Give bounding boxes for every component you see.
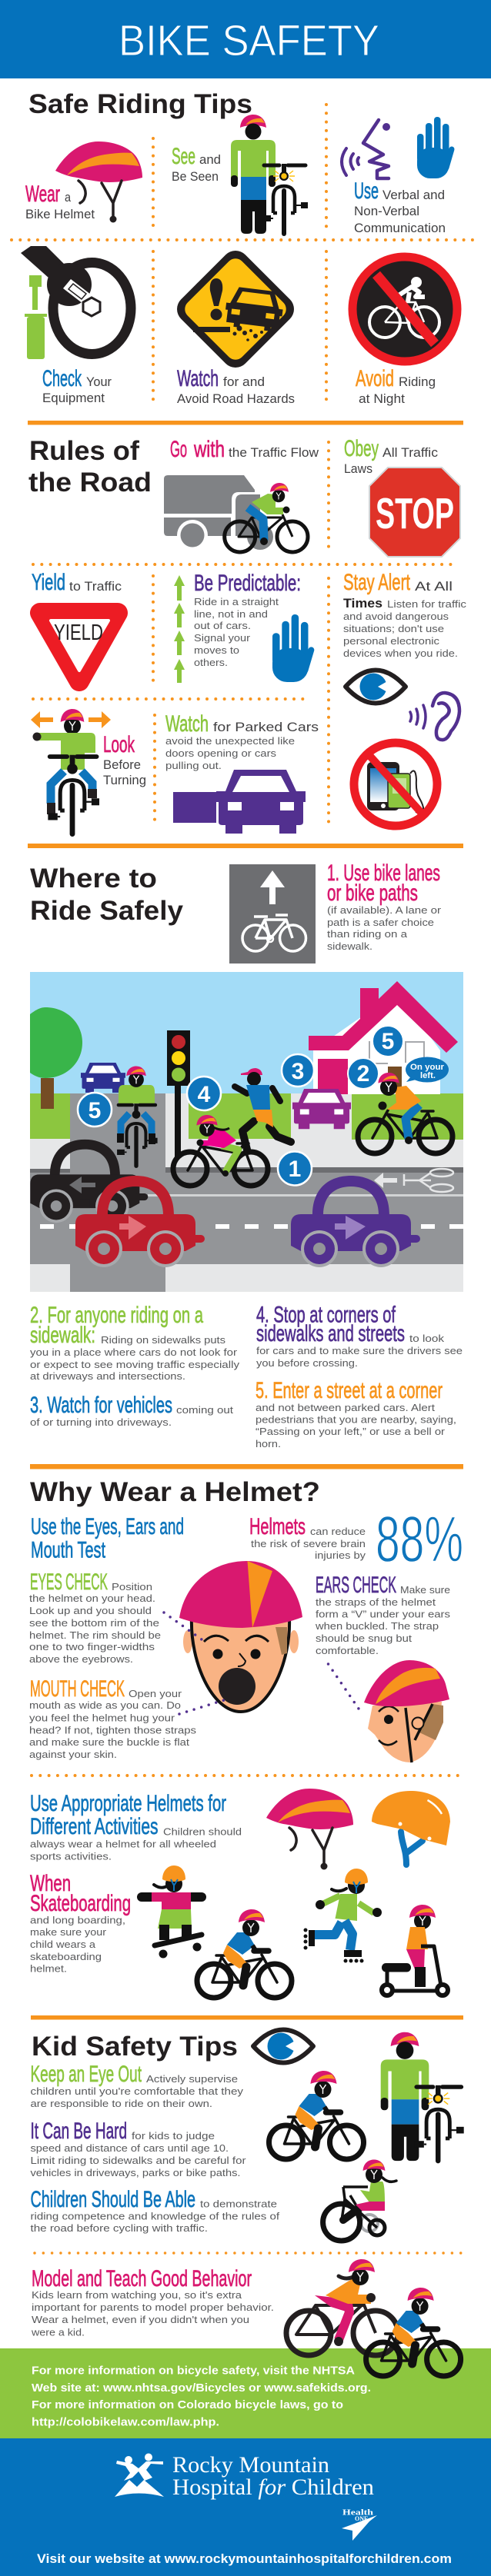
stat: helmets reduce injuries 88%: injuries by xyxy=(315,1549,366,1561)
figure: skateboarder xyxy=(137,1865,206,1958)
rule: be predictable: moves to xyxy=(194,644,239,656)
child on bike xyxy=(173,1115,268,1186)
text: stop at corners: you before crossing. xyxy=(256,1357,358,1369)
rule: go with the traffic flow: Go xyxy=(170,437,187,462)
text: eyes check: the helmet on your head. xyxy=(29,1593,155,1604)
heading: rules of the road: the Road xyxy=(28,468,152,498)
panel: where to ride safely xyxy=(30,860,463,1449)
icon: skateboard helmet xyxy=(372,1791,450,1865)
car: distant blue xyxy=(81,1063,125,1093)
text: ears check: the straps of the helmet xyxy=(316,1596,436,1608)
text: eyes check: Position xyxy=(112,1581,152,1593)
rule: be predictable: Ride in a straight xyxy=(194,596,279,607)
heading: where to ride safely: Ride Safely xyxy=(30,896,184,926)
marker 4 xyxy=(187,1077,221,1110)
text: ears check: form a “V” under your ears xyxy=(316,1609,451,1619)
tip: avoid riding at night: at Night xyxy=(359,392,405,406)
subheading: eyes ears mouth test xyxy=(31,1514,184,1563)
rule: be predictable: others. xyxy=(194,657,228,668)
rule: be predictable: out of cars. xyxy=(194,620,251,631)
text: keep an eye out: Actively supervise xyxy=(146,2074,238,2085)
tip: use verbal and non-verbal communication xyxy=(342,117,452,235)
panel: safe riding tips xyxy=(12,89,481,406)
text: keep an eye out: are responsible to ride on their own. xyxy=(31,2098,212,2109)
rule: obey all traffic laws: STOP xyxy=(376,489,454,538)
text: appropriate helmets: always wear a helmet for all wheeled xyxy=(30,1839,216,1850)
footer band: more information: For more information on bicycle safety, visit the NHTSA xyxy=(32,2364,355,2378)
text: appropriate helmets: sports activities. xyxy=(30,1851,112,1862)
icon: no personal devices xyxy=(354,743,437,826)
tip: watch for and avoid road hazards: Watch xyxy=(177,366,219,391)
text: mouth check: head? If not, tighten those straps xyxy=(29,1724,197,1736)
logo mark xyxy=(115,2453,164,2497)
rule: stay alert at all times: At All xyxy=(415,580,453,594)
marker 4: 4 xyxy=(198,1082,211,1107)
footer band: hospital logo and website xyxy=(0,2438,491,2576)
figure: parent and child cycling xyxy=(286,2259,461,2376)
text: model and teach good behavior: Wear a helmet, even if you didn't when you xyxy=(32,2315,249,2325)
text: use bike lanes or bike paths xyxy=(327,860,442,952)
text: use bike lanes or bike paths: than riding on a xyxy=(327,928,408,940)
text: mouth check: Open your xyxy=(129,1688,182,1699)
text: model and teach good behavior: were a kid. xyxy=(31,2327,85,2338)
logo: health one: Health xyxy=(342,2508,373,2518)
rule: yield to traffic: to Traffic xyxy=(69,580,122,594)
rule: obey all traffic laws: All Traffic xyxy=(382,446,438,460)
heading: where to ride safely: Where to xyxy=(30,864,157,894)
stat: helmets reduce injuries 88% xyxy=(249,1503,463,1576)
text: watch for vehicles xyxy=(30,1393,233,1428)
rule: yield to traffic: YIELD xyxy=(54,621,103,645)
text: mouth check: mouth as wide as you can. Do xyxy=(29,1699,181,1711)
text: model and teach good behavior: Kids learn from watching you, so it's extra xyxy=(32,2290,242,2301)
car: parked purple xyxy=(292,1089,351,1129)
text: mouth check: and make sure the buckle is flat xyxy=(29,1736,189,1748)
text: eyes check: Look up and you should xyxy=(29,1605,152,1616)
illustration: face with helmet xyxy=(179,1561,302,1712)
text: eyes check: see the bottom rim of the xyxy=(29,1617,159,1629)
tip: use verbal and non-verbal communication: Verbal and xyxy=(382,188,445,202)
tip: check your equipment: Your xyxy=(86,375,112,389)
footer band: more information: Web site at: www.nhtsa.gov/Bicycles or www.safekids.org. xyxy=(32,2381,371,2395)
footer band: more information: http://colobikelaw.com/law.php. xyxy=(32,2416,219,2428)
rule: look before turning: Turning xyxy=(103,774,146,787)
text: enter a street at a corner xyxy=(256,1378,456,1449)
speech bubble: on your left: On your xyxy=(410,1063,445,1072)
text: enter a street at a corner: horn. xyxy=(256,1438,281,1449)
panel: kid safety tips xyxy=(31,2030,464,2338)
text: ears check: when buckled. The strap xyxy=(315,1620,439,1632)
text: stop at corners: 4. Stop at corners of xyxy=(256,1303,396,1327)
text: sidewalk rule xyxy=(30,1303,240,1382)
text: ears check xyxy=(315,1573,451,1656)
marker 3 xyxy=(282,1054,314,1087)
website: Visit our website at www.rockymountainhospitalforchildren.com xyxy=(37,2551,452,2566)
car: red, eastbound xyxy=(75,1176,205,1267)
text: mouth check: MOUTH CHECK xyxy=(30,1676,125,1702)
text: keep an eye out xyxy=(31,2062,244,2109)
panel: rules of the road xyxy=(28,436,467,834)
text: watch for vehicles: 3. Watch for vehicles xyxy=(30,1393,172,1418)
marker 3: 3 xyxy=(292,1059,304,1084)
text: it can be hard: for kids to judge xyxy=(132,2131,215,2142)
heading: where to ride safely xyxy=(30,864,184,926)
text: use bike lanes or bike paths: (if available). A lane or xyxy=(327,904,442,916)
text: stop at corners xyxy=(256,1303,463,1369)
text: when skateboarding: and long boarding, xyxy=(30,1915,125,1925)
text: eyes check xyxy=(29,1569,161,1665)
tip: wear a bike helmet: Wear xyxy=(25,181,60,207)
figure: child on bike xyxy=(197,1909,292,1998)
text: enter a street at a corner: and not between parked cars. Alert xyxy=(256,1402,435,1413)
panel: why wear a helmet xyxy=(29,1477,463,1998)
illustration: side of head with helmet xyxy=(364,1660,449,1762)
tip: avoid riding at night: Riding xyxy=(399,375,436,389)
rule: stay alert at all times xyxy=(343,570,467,826)
marker 2 xyxy=(348,1058,379,1089)
rule: obey all traffic laws: Laws xyxy=(344,462,372,476)
text: appropriate helmets: Use Appropriate Helmets for xyxy=(30,1791,226,1816)
text: stop at corners: sidewalks and streets xyxy=(256,1321,405,1346)
marker 5: house xyxy=(372,1026,403,1057)
text: eyes check: EYES CHECK xyxy=(30,1569,108,1595)
text: eyes check: helmet. The rim should be xyxy=(29,1629,161,1641)
text: model and teach good behavior xyxy=(31,2266,274,2338)
subheading: eyes ears mouth test: Mouth Test xyxy=(31,1538,105,1563)
text: watch for vehicles: coming out xyxy=(176,1404,233,1416)
text: keep an eye out: Keep an Eye Out xyxy=(31,2062,142,2087)
marker 5: house: 5 xyxy=(382,1029,394,1054)
rule: watch for parked cars: doors opening or cars xyxy=(165,747,277,759)
figure: adult with bike xyxy=(381,2032,464,2161)
text: when skateboarding xyxy=(30,1871,131,1975)
text: children should be able: the road before cycling with traffic. xyxy=(31,2223,208,2234)
rule: stay alert at all times: devices when you ride. xyxy=(343,647,458,659)
tip: avoid riding at night xyxy=(352,257,457,406)
text: it can be hard xyxy=(31,2118,246,2178)
rule: be predictable: Signal your xyxy=(194,632,251,644)
marker 1: 1 xyxy=(289,1157,301,1182)
footer band: more information: For more information on Colorado bicycle laws, go to xyxy=(32,2398,343,2411)
text: sidewalk rule: 2. For anyone riding on a xyxy=(30,1303,203,1328)
icon: eye xyxy=(253,2030,313,2062)
tip: check your equipment xyxy=(21,246,131,405)
rule: go with the traffic flow: with xyxy=(193,437,225,462)
rule: go with the traffic flow xyxy=(164,437,319,552)
tree xyxy=(30,1007,82,1109)
text: it can be hard: It Can Be Hard xyxy=(31,2118,127,2144)
text: when skateboarding: child wears a xyxy=(30,1939,96,1950)
text: children should be able: to demonstrate xyxy=(200,2199,277,2210)
logo wordmark: Hospital for Children xyxy=(172,2474,374,2500)
text: sidewalk rule: at driveways and intersections. xyxy=(30,1370,185,1382)
text: keep an eye out: children until you're comfortable that they xyxy=(31,2086,244,2097)
rule: be predictable: Be Predictable: xyxy=(194,571,301,596)
house xyxy=(309,981,458,1094)
text: sidewalk rule: sidewalk: xyxy=(30,1323,95,1348)
text: ears check: should be snug but xyxy=(316,1632,412,1644)
cyclist: front view xyxy=(117,1066,158,1166)
tip: avoid riding at night: Avoid xyxy=(356,366,394,391)
tip: see and be seen: See xyxy=(172,144,195,169)
heading: why wear a helmet: Why Wear a Helmet? xyxy=(30,1477,320,1507)
tip: see and be seen: Be Seen xyxy=(172,170,219,184)
figure: inline skater xyxy=(303,1869,382,1962)
text: stop at corners: to look xyxy=(409,1333,445,1344)
tip: wear a bike helmet: Bike Helmet xyxy=(25,208,95,221)
marker 5: street xyxy=(78,1093,112,1127)
text: appropriate helmets: Children should xyxy=(163,1825,242,1838)
rule: go with the traffic flow: the Traffic Flow xyxy=(229,446,319,460)
heading: rules of the road: Rules of xyxy=(29,436,139,466)
text: use bike lanes or bike paths: path is a safer choice xyxy=(327,917,434,928)
text: children should be able xyxy=(31,2187,280,2234)
rule: yield to traffic: Yield xyxy=(32,570,65,595)
header band xyxy=(0,0,491,78)
speech bubble: on your left: left. xyxy=(420,1071,436,1080)
text: when skateboarding: When xyxy=(30,1871,71,1896)
text: mouth check: against your skin. xyxy=(29,1749,117,1760)
traffic light xyxy=(167,1030,190,1158)
heading: rules of the road xyxy=(28,436,152,498)
figure: girl with training wheels xyxy=(323,2159,396,2241)
marker 2: 2 xyxy=(357,1061,369,1087)
rule: stay alert at all times: and avoid dangerous xyxy=(343,611,449,622)
rule: yield to traffic xyxy=(32,570,122,681)
tip: use verbal and non-verbal communication: Use xyxy=(354,178,379,204)
text: enter a street at a corner: pedestrians that you are nearby, saying, xyxy=(256,1413,456,1426)
rule: watch for parked cars: Watch xyxy=(165,711,209,737)
text: model and teach good behavior: Model and Teach Good Behavior xyxy=(32,2266,252,2291)
logo: health one: ONE xyxy=(355,2515,368,2522)
text: appropriate helmets xyxy=(30,1791,242,1862)
stat: helmets reduce injuries 88%: the risk of severe brain xyxy=(251,1538,366,1549)
rule: stay alert at all times: Times xyxy=(343,597,382,611)
text: enter a street at a corner: “Passing on your left,” or use a bell or xyxy=(256,1426,446,1437)
rule: stay alert at all times: Listen for traffic xyxy=(387,598,467,610)
car: black, westbound xyxy=(30,1140,148,1223)
rule: be predictable: line, not in and xyxy=(194,608,268,620)
logo: health one xyxy=(342,2508,377,2541)
marker 1 xyxy=(278,1152,312,1186)
text: ears check: EARS CHECK xyxy=(316,1573,396,1598)
rule: look before turning: Before xyxy=(103,758,141,772)
stat: helmets reduce injuries 88%: can reduce xyxy=(310,1526,366,1537)
text: model and teach good behavior: important for parents to model proper behavior. xyxy=(32,2302,274,2313)
figure: child on scooter xyxy=(382,1905,448,1995)
tip: use verbal and non-verbal communication: Non-Verbal xyxy=(354,205,419,218)
tip: watch for and avoid road hazards: Avoid Road Hazards xyxy=(177,392,295,406)
icon: bike lane sign xyxy=(229,864,316,964)
rule: stay alert at all times: situations; don't use xyxy=(343,623,444,634)
text: when skateboarding: helmet. xyxy=(30,1962,67,1975)
logo wordmark xyxy=(172,2452,374,2500)
text: children should be able: riding competence and knowledge of the rules of xyxy=(31,2212,280,2222)
icon: bike lane marking xyxy=(374,1169,453,1192)
cyclist: sidewalk rider xyxy=(358,1073,453,1153)
car: purple, eastbound xyxy=(291,1176,420,1267)
text: sidewalk rule: or expect to see moving traffic especially xyxy=(30,1359,240,1370)
text: use bike lanes or bike paths: or bike paths xyxy=(327,880,418,906)
text: ears check: comfortable. xyxy=(316,1645,379,1656)
rule: watch for parked cars xyxy=(165,711,319,834)
rule: be predictable xyxy=(174,571,311,683)
text: mouth check xyxy=(29,1676,197,1760)
figure: child on bike xyxy=(269,2071,363,2159)
text: appropriate helmets: Different Activities xyxy=(30,1814,159,1839)
tip: watch for and avoid road hazards: for and xyxy=(223,375,265,389)
text: ears check: Make sure xyxy=(400,1584,450,1596)
tip: check your equipment: Equipment xyxy=(42,391,105,405)
rule: watch for parked cars: avoid the unexpected like xyxy=(165,735,295,747)
text: eyes check: above the eyebrows. xyxy=(29,1653,133,1665)
text: use bike lanes or bike paths: sidewalk. xyxy=(327,940,372,952)
rule: watch for parked cars: pulling out. xyxy=(165,760,222,771)
text: when skateboarding: make sure your xyxy=(30,1926,107,1938)
rule: look before turning xyxy=(31,709,146,834)
text: sidewalk rule: you in a place where cars do not look for xyxy=(30,1346,238,1358)
icon: ear xyxy=(410,693,459,740)
rule: stay alert at all times: Stay Alert xyxy=(343,570,410,595)
subheading: eyes ears mouth test: Use the Eyes, Ears and xyxy=(31,1514,184,1539)
logo wordmark: Rocky Mountain xyxy=(172,2452,329,2478)
text: when skateboarding: Skateboarding xyxy=(30,1891,131,1916)
illustration: street scene xyxy=(30,972,463,1292)
stat: helmets reduce injuries 88%: Helmets xyxy=(249,1514,306,1539)
text: it can be hard: Limit riding to sidewalks and be careful for xyxy=(31,2155,246,2166)
title: BIKE SAFETY xyxy=(119,16,379,65)
tip: check your equipment: Check xyxy=(42,366,82,391)
rule: obey all traffic laws: Obey xyxy=(344,436,379,461)
icon: bike helmet xyxy=(266,1789,353,1870)
footer band: more information xyxy=(0,2348,491,2438)
text: watch for vehicles: of or turning into driveways. xyxy=(30,1416,172,1428)
text: eyes check: one to two finger-widths xyxy=(29,1641,155,1652)
tip: use verbal and non-verbal communication: Communication xyxy=(354,221,446,235)
text: it can be hard: speed and distance of cars until age 10. xyxy=(31,2143,229,2154)
icon: eye xyxy=(346,671,406,703)
marker 5: street: 5 xyxy=(89,1098,101,1123)
text: mouth check: you feel the helmet hug your xyxy=(29,1712,175,1724)
text: children should be able: Children Should Be Able xyxy=(31,2187,195,2212)
rule: obey all traffic laws xyxy=(344,436,460,557)
heading: safe riding tips: Safe Riding Tips xyxy=(28,89,252,119)
text: sidewalk rule: Riding on sidewalks puts xyxy=(101,1334,226,1346)
tip: wear a bike helmet xyxy=(25,141,142,223)
text: stop at corners: for cars and to make sure the drivers see xyxy=(256,1345,463,1356)
tip: wear a bike helmet: a xyxy=(65,191,72,205)
runner xyxy=(235,1068,291,1150)
tip: see and be seen: and xyxy=(199,153,221,167)
rule: watch for parked cars: for Parked Cars xyxy=(213,721,319,734)
text: when skateboarding: skateboarding xyxy=(30,1951,102,1962)
speech bubble: on your left xyxy=(406,1057,449,1083)
heading: kid safety tips: Kid Safety Tips xyxy=(32,2032,238,2062)
tip: watch for and avoid road hazards xyxy=(172,245,299,406)
tip: see and be seen xyxy=(172,115,308,234)
text: it can be hard: vehicles in driveways, parks or bike paths. xyxy=(31,2168,240,2178)
rule: look before turning: Look xyxy=(103,732,135,757)
rule: stay alert at all times: personal electronic xyxy=(343,635,440,647)
